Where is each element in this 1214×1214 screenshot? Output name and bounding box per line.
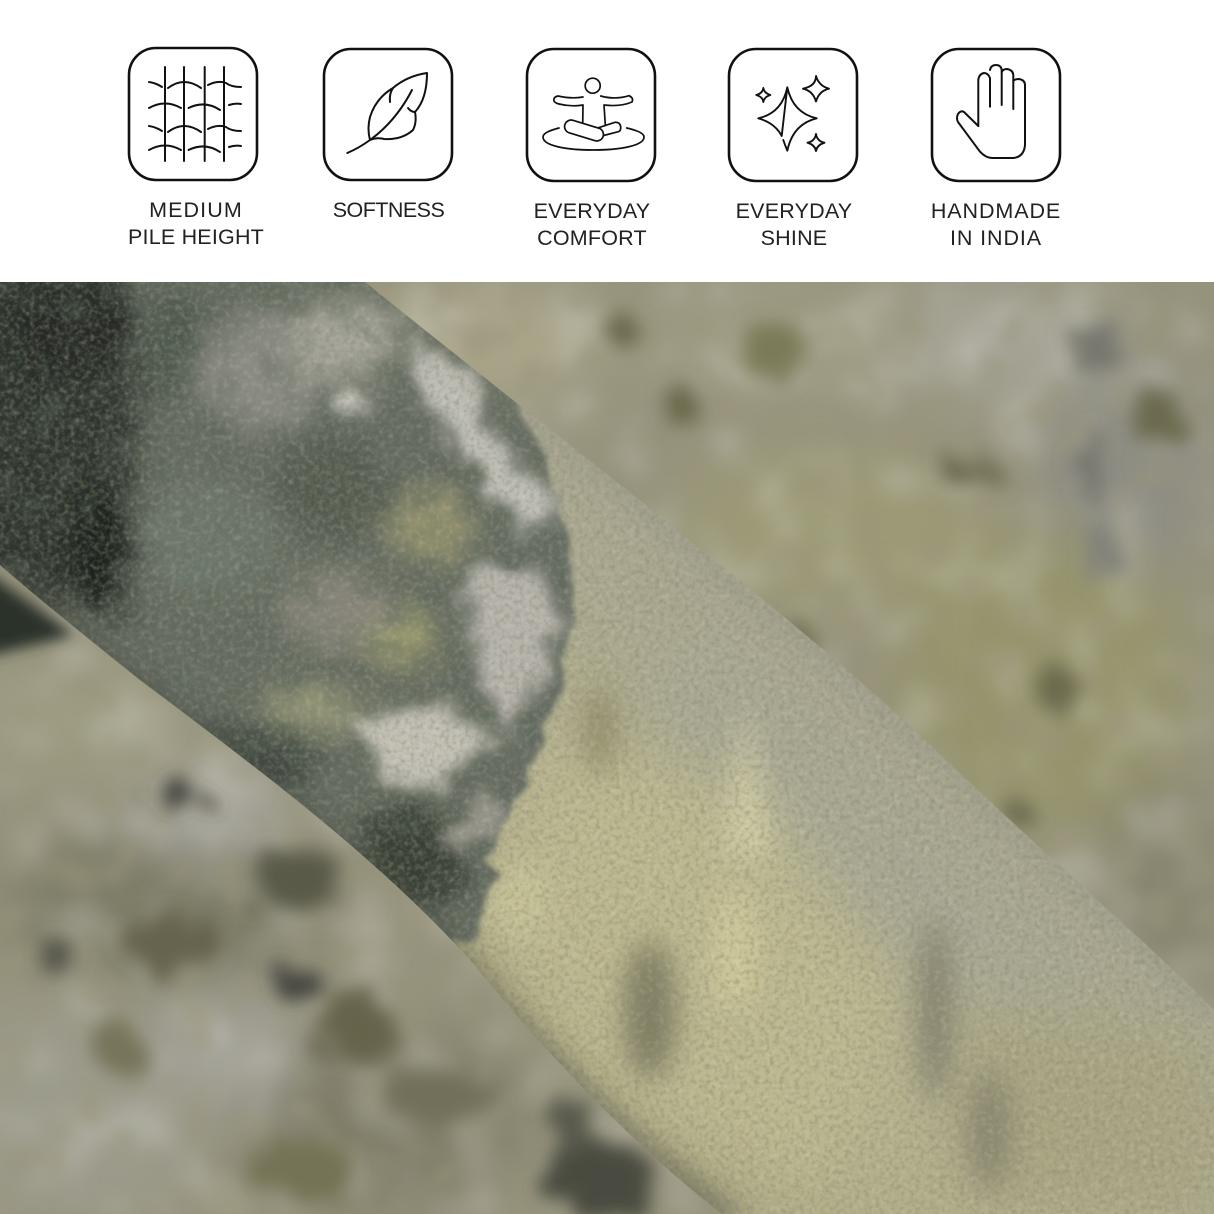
dark shadow under the roll — [0, 560, 75, 660]
icon: meditating figure — [526, 48, 656, 182]
label — [736, 199, 852, 250]
label: PILE HEIGHT — [128, 225, 264, 249]
label — [534, 199, 650, 250]
panel: everyday shine — [728, 48, 858, 250]
photo: rolled rug close-up — [0, 282, 1214, 1214]
label: COMFORT — [537, 226, 647, 250]
panel: everyday comfort — [526, 48, 656, 250]
icon: woven pile grid — [128, 46, 258, 182]
label: MEDIUM — [149, 198, 243, 222]
panel: medium pile height — [128, 46, 264, 249]
label: EVERYDAY — [736, 199, 852, 223]
background rug surface — [0, 280, 1214, 1214]
label: SHINE — [761, 226, 827, 250]
roll edge shading — [54, 376, 740, 1214]
label — [931, 199, 1061, 250]
label: EVERYDAY — [534, 199, 650, 223]
dark patterned section — [0, 282, 578, 946]
panel: handmade in india — [930, 48, 1062, 250]
label — [128, 198, 264, 249]
label: HANDMADE — [931, 199, 1061, 223]
icon: feather — [322, 48, 454, 182]
label: IN INDIA — [950, 226, 1042, 250]
icon: open hand — [930, 48, 1062, 182]
panel: softness — [322, 48, 454, 222]
label: SOFTNESS — [333, 198, 444, 222]
icon: sparkles — [728, 48, 858, 182]
